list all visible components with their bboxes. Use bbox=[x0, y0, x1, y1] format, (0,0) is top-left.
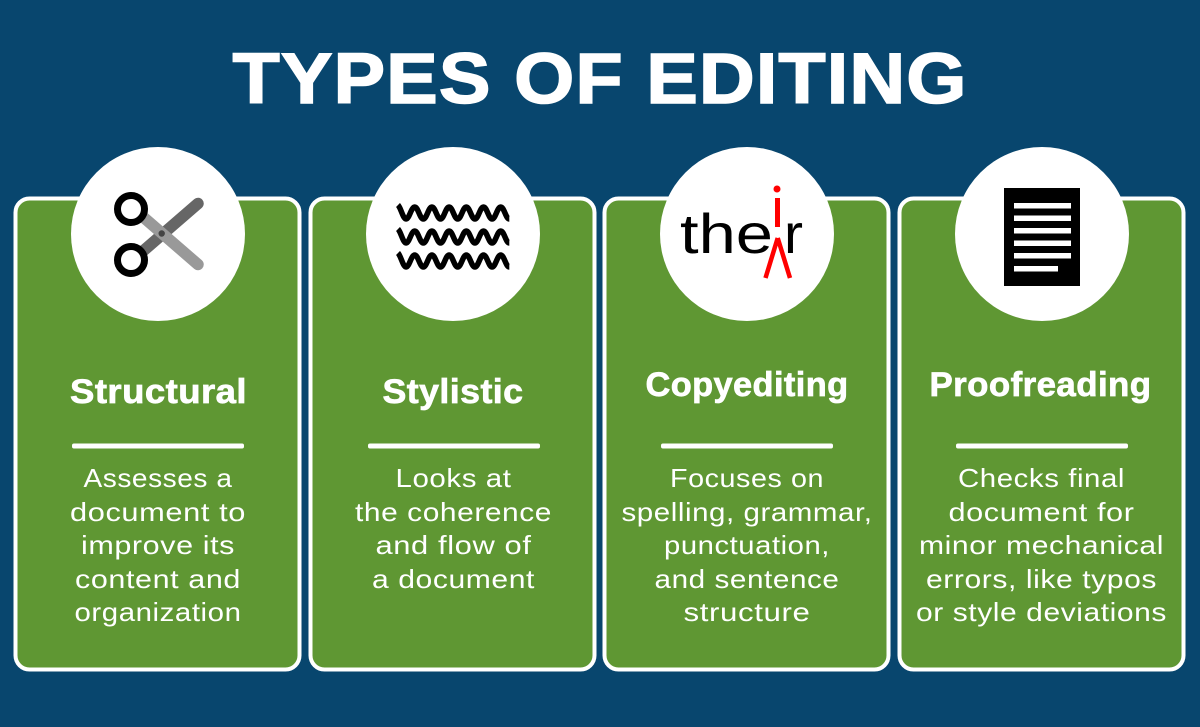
heading: structural: Structural bbox=[70, 373, 247, 411]
text: stylistic description: the coherence bbox=[355, 497, 552, 527]
text: proofreading description: minor mechanical bbox=[919, 530, 1164, 560]
text: stylistic description: and flow of bbox=[376, 530, 532, 560]
heading: copyediting: Copyediting bbox=[646, 366, 848, 404]
icon: wavy lines bbox=[398, 205, 509, 267]
panel: structural bbox=[16, 147, 300, 670]
text: structural description: Assesses a bbox=[84, 463, 233, 493]
heading: proofreading: Proofreading bbox=[930, 366, 1152, 404]
text: structural description: content and bbox=[75, 564, 241, 594]
panel: copyediting bbox=[604, 147, 888, 670]
text: structural description bbox=[70, 463, 246, 627]
text: proofreading description: document for bbox=[948, 497, 1134, 527]
panel: stylistic bbox=[310, 147, 594, 670]
text: structural description: organization bbox=[74, 597, 242, 627]
text: proofreading description: Checks final bbox=[958, 463, 1125, 493]
text: proofreading description: or style deviations bbox=[916, 597, 1167, 627]
panel: proofreading bbox=[900, 147, 1184, 670]
text: copyediting description bbox=[622, 463, 872, 627]
text: copyediting description: structure bbox=[684, 597, 810, 627]
icon: their with caret insertion: the bbox=[680, 202, 773, 265]
text: structural description: improve its bbox=[81, 530, 235, 560]
text: proofreading description bbox=[916, 463, 1167, 627]
text: stylistic description: a document bbox=[372, 564, 535, 594]
icon: their with caret insertion: r bbox=[784, 202, 803, 265]
icon: scissors bbox=[118, 196, 198, 274]
text: copyediting description: and sentence bbox=[654, 564, 840, 594]
title: TYPES OF EDITING bbox=[232, 40, 968, 119]
icon: their with caret insertion bbox=[680, 186, 803, 278]
text: stylistic description: Looks at bbox=[396, 463, 512, 493]
text: proofreading description: errors, like typos bbox=[926, 564, 1157, 594]
heading: stylistic: Stylistic bbox=[382, 373, 524, 411]
text: structural description: document to bbox=[70, 497, 246, 527]
text: copyediting description: Focuses on bbox=[670, 463, 824, 493]
text: copyediting description: spelling, grammar, bbox=[622, 497, 872, 527]
text: copyediting description: punctuation, bbox=[664, 530, 830, 560]
icon: document bbox=[1004, 188, 1080, 286]
text: stylistic description bbox=[355, 463, 552, 594]
